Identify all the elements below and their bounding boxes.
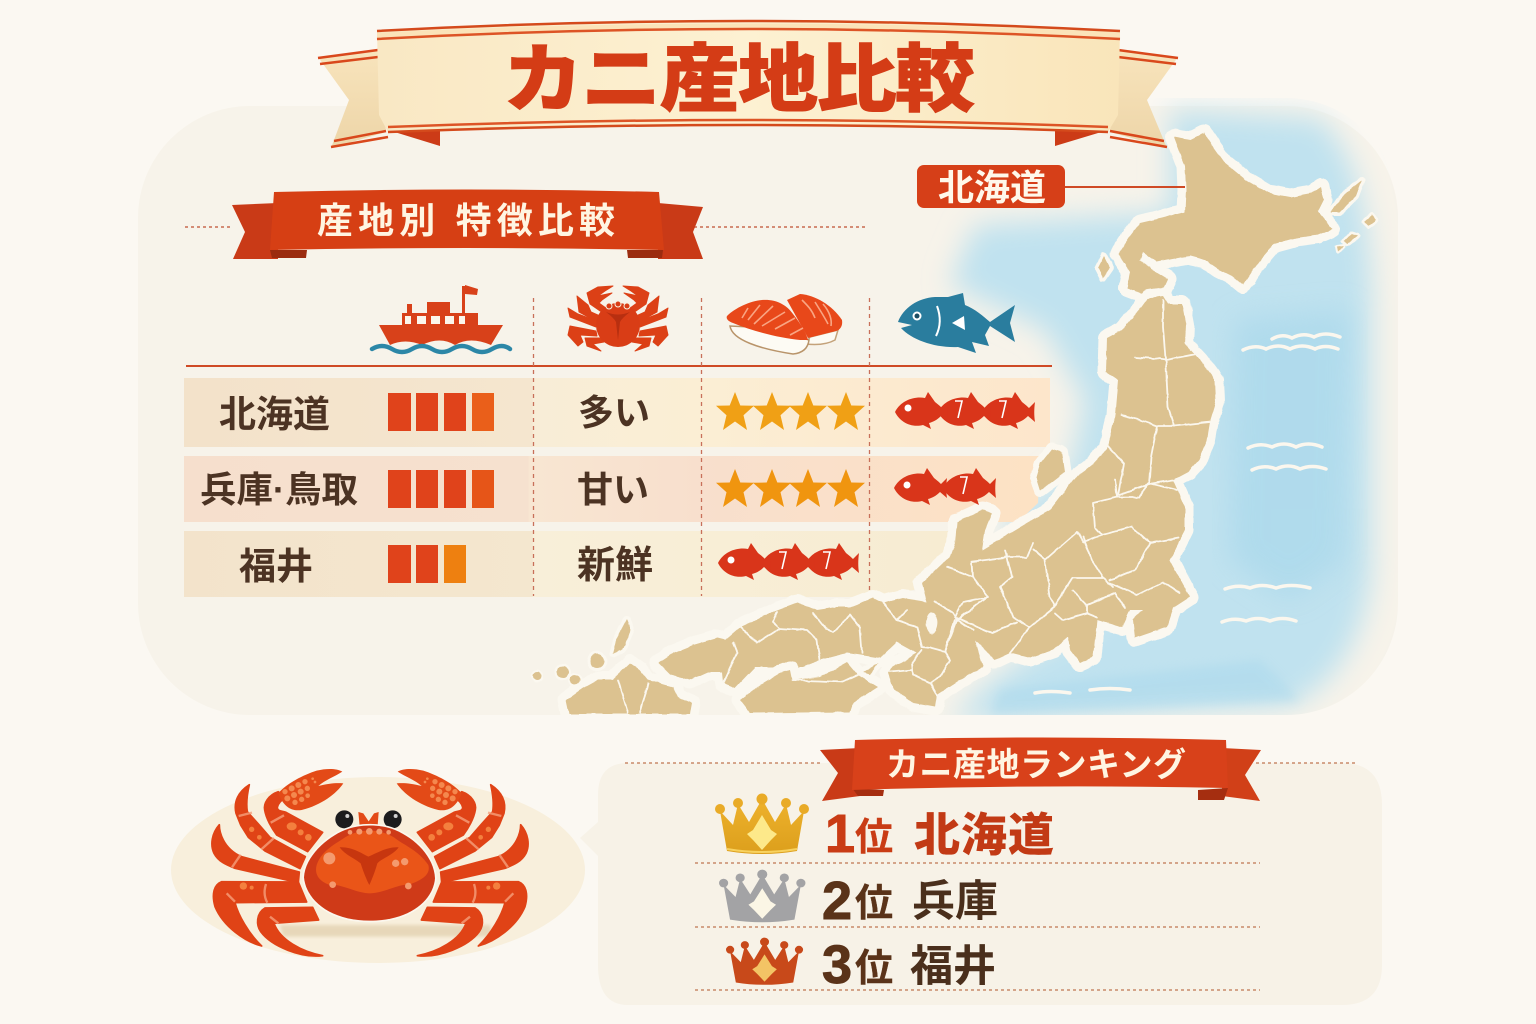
ocean waves	[1035, 334, 1340, 693]
Awaji	[863, 663, 878, 674]
table header rule	[186, 365, 1052, 367]
ranking ribbon	[820, 738, 1261, 801]
icon: blue fish	[898, 293, 1015, 353]
panel: map and comparison backdrop	[138, 106, 1398, 715]
eyes and horns	[358, 812, 379, 830]
Kyushu	[566, 663, 692, 714]
panel: ranking background	[580, 763, 1382, 1005]
icon: sushi	[727, 294, 842, 354]
Shikoku	[740, 662, 878, 713]
icon: small crab	[568, 286, 668, 351]
Honshu	[658, 296, 1216, 707]
rank 3: 福井	[910, 943, 996, 991]
amount text: 多い	[578, 392, 650, 433]
rank 1: 1	[825, 804, 855, 864]
right legs	[397, 769, 528, 956]
column dividers	[534, 298, 870, 596]
left tail	[318, 50, 386, 148]
table row backgrounds	[184, 378, 1050, 597]
bars	[388, 393, 494, 431]
bronze crown	[726, 938, 803, 985]
prefecture borders	[618, 300, 1210, 713]
ribbon folds	[388, 128, 440, 146]
label: 北海道	[219, 394, 330, 435]
rank 1	[715, 794, 1054, 864]
Hokkaido map label: 北海道	[938, 167, 1046, 208]
rank 2: 位	[855, 883, 893, 925]
crab shadow	[280, 925, 493, 937]
stars	[716, 469, 865, 507]
rank 2: 2	[822, 871, 852, 931]
freshness text: 新鮮	[577, 545, 653, 587]
silver crown	[719, 870, 805, 922]
section ribbon: comparison: 産地別 特徴比較	[317, 200, 615, 241]
dotted rules	[625, 763, 1355, 990]
Hokkaido map label	[917, 165, 1185, 208]
fish rating	[894, 468, 996, 505]
fish rating	[895, 392, 1035, 429]
taste text: 甘い	[577, 469, 649, 510]
row: 北海道	[219, 392, 1035, 435]
rank 3	[726, 935, 996, 995]
rank 1: 位	[855, 817, 893, 859]
left legs	[212, 769, 343, 956]
stars	[716, 392, 865, 430]
gold crown	[715, 794, 809, 854]
bars	[388, 545, 466, 583]
rank 3: 3	[822, 935, 852, 995]
title ribbon	[318, 21, 1178, 148]
illustration: large snow crab	[212, 769, 528, 956]
Sado island	[1036, 449, 1065, 491]
crab backdrop ellipse	[171, 777, 585, 963]
fish rating	[718, 543, 859, 580]
main ribbon	[377, 22, 1120, 132]
ranking ribbon: カニ産地ランキング	[886, 746, 1186, 783]
map of Japan	[533, 133, 1376, 714]
comparison table	[186, 285, 1052, 596]
icon: ship	[372, 285, 510, 352]
rank 2	[719, 870, 998, 931]
carapace	[304, 825, 435, 921]
sea watercolor	[950, 110, 1372, 722]
row: 兵庫・鳥取	[200, 468, 996, 510]
label: 兵庫·鳥取	[200, 469, 358, 510]
bars	[388, 470, 494, 508]
ranking section	[625, 738, 1355, 995]
title text: カニ産地比較	[503, 39, 975, 121]
right tail	[1110, 50, 1178, 148]
small islands	[613, 619, 631, 654]
Hokkaido	[1118, 133, 1332, 296]
rank 3: 位	[855, 948, 893, 990]
row: 福井	[239, 543, 859, 587]
section ribbon: comparison	[185, 190, 865, 259]
label: 福井	[239, 546, 313, 587]
rank 1: 北海道	[914, 809, 1054, 861]
rank 2: 兵庫	[912, 878, 998, 926]
